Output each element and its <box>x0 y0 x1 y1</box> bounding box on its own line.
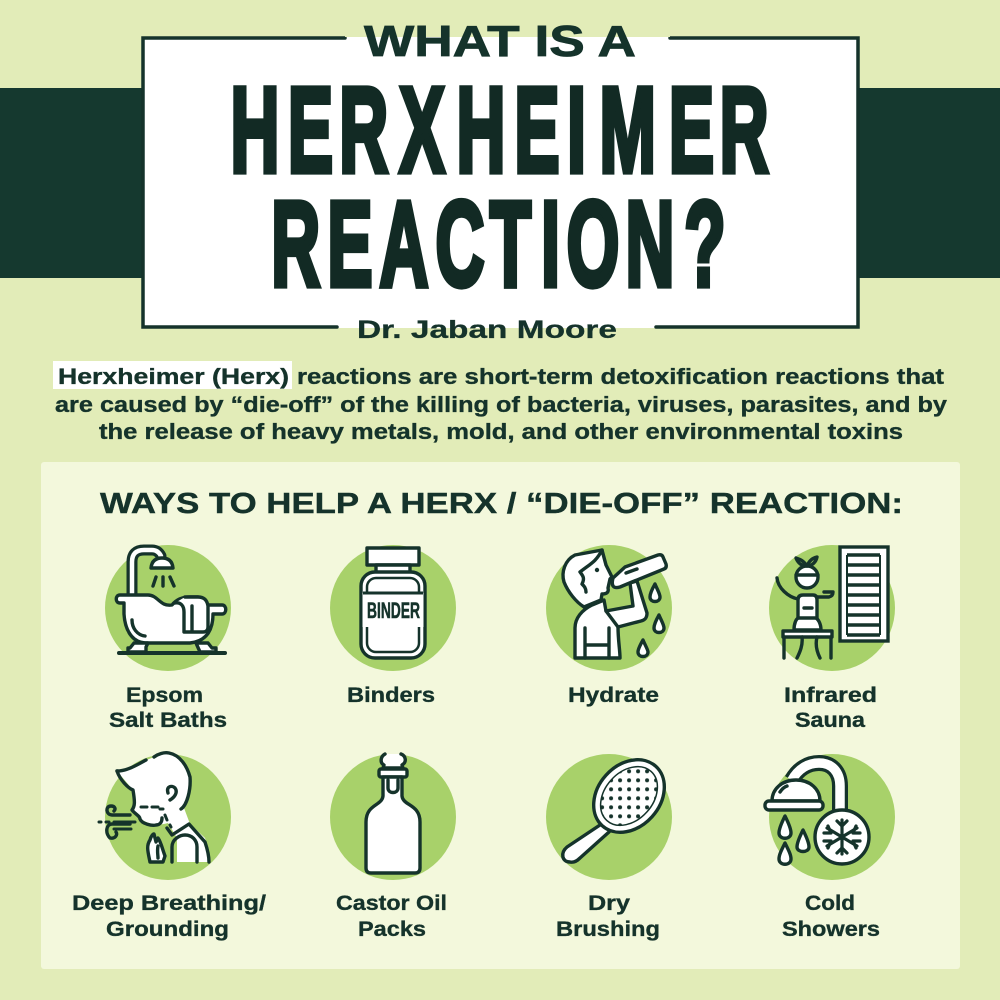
icon: man drinking <box>546 545 672 671</box>
label: dry brushing: Brushing <box>556 918 660 941</box>
label: deep breathing grounding <box>72 892 266 941</box>
label: infrared sauna <box>784 684 877 732</box>
label: cold showers <box>782 892 880 941</box>
label: dry brushing <box>556 892 660 941</box>
title: herxheimer: HERXHEIMER <box>231 62 769 197</box>
author: Dr. Jaban Moore <box>357 316 617 344</box>
intro text block <box>53 361 948 444</box>
label: epsom salt baths: Epsom <box>126 684 203 707</box>
icon: bath <box>105 545 231 671</box>
title: what is a: WHAT IS A <box>364 17 636 66</box>
intro text block: are caused by “die-off” of the killing of bacteria, viruses, parasites, and by <box>55 392 948 417</box>
label: cold showers: Showers <box>782 918 880 941</box>
intro text block: reactions are short-term detoxification reactions that <box>297 364 945 389</box>
label: deep breathing grounding: Grounding <box>106 918 229 941</box>
binder label text: BINDER <box>367 598 420 623</box>
title box <box>143 20 858 341</box>
label: epsom salt baths: Salt Baths <box>109 709 227 732</box>
icon: castor oil bottle <box>330 754 456 880</box>
icon: cold shower <box>765 754 895 880</box>
intro text block: the release of heavy metals, mold, and other environmental toxins <box>99 419 903 444</box>
label: castor oil packs <box>336 892 447 941</box>
icon: binder bottle <box>330 545 456 671</box>
panel heading: WAYS TO HELP A HERX / “DIE-OFF” REACTION: <box>100 488 903 520</box>
label: hydrate: Hydrate <box>568 684 659 707</box>
label: castor oil packs: Packs <box>358 918 426 941</box>
label: dry brushing: Dry <box>588 892 630 915</box>
intro text block: Herxheimer (Herx) <box>58 364 289 389</box>
label: deep breathing grounding: Deep Breathing/ <box>72 892 266 915</box>
icon: deep breathing <box>99 753 231 880</box>
dark horizontal band <box>0 88 1000 278</box>
label: infrared sauna: Sauna <box>795 709 865 732</box>
panel: ways to help <box>41 462 960 969</box>
icon: infrared sauna <box>769 545 895 671</box>
label: cold showers: Cold <box>805 892 855 915</box>
label: epsom salt baths <box>109 684 227 732</box>
title: reaction: REACTION? <box>271 176 726 311</box>
label: castor oil packs: Castor Oil <box>336 892 447 915</box>
label: binders: Binders <box>347 684 435 707</box>
label: infrared sauna: Infrared <box>784 684 877 707</box>
icon: dry brush <box>546 746 679 880</box>
